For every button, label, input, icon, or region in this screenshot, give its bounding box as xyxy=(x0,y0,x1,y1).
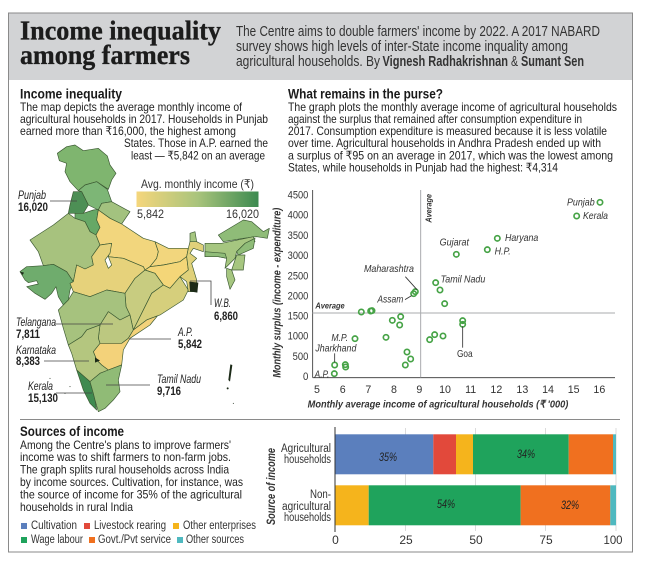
callout: Karnataka: 8,383 xyxy=(16,356,40,368)
x axis ticks xyxy=(314,384,605,396)
state points xyxy=(332,200,603,376)
scatter intro text: a surplus of ₹95 on an average in 2017, which was the lowest among xyxy=(288,148,613,162)
bar: agricultural households: 35% xyxy=(379,452,397,464)
y axis ticks: 2500 xyxy=(288,270,308,282)
y axis ticks: 4000 xyxy=(288,210,308,222)
callout: Tamil Nadu: 9,716 xyxy=(157,386,181,398)
x axis ticks: 15 xyxy=(568,384,580,396)
callout: W.B. xyxy=(190,281,238,323)
callout: Punjab xyxy=(18,190,77,214)
state labels: Jharkhand xyxy=(314,344,357,355)
state labels: Tamil Nadu xyxy=(441,274,486,285)
callout: W.B.: 6,860 xyxy=(214,311,238,323)
legend: income sources: Other sources xyxy=(186,534,244,546)
scatter intro text: over time. Agricultural households in Andhra Pradesh ended up with xyxy=(288,136,601,150)
heading: income inequality: Income inequality xyxy=(20,86,122,102)
callout: Kerala xyxy=(28,381,92,405)
callout: W.B.: W.B. xyxy=(214,298,231,310)
legend: monthly income colour ramp xyxy=(136,177,259,221)
state labels: M.P. xyxy=(331,333,348,344)
state labels: Kerala xyxy=(583,211,608,222)
axis labels: 100 xyxy=(604,533,623,547)
panel: sources of income xyxy=(20,423,623,547)
callout: Telangana: Telangana xyxy=(16,317,56,329)
x axis ticks: 7 xyxy=(365,384,371,396)
y axis ticks: 1000 xyxy=(288,331,308,343)
map intro text: States. Those in A.P. earned the xyxy=(124,136,268,150)
map intro text xyxy=(20,100,268,162)
callout: Telangana: 7,811 xyxy=(16,329,41,341)
state labels: A.P. xyxy=(314,369,329,380)
x axis ticks: 12 xyxy=(490,384,502,396)
y axis ticks: 3500 xyxy=(288,230,308,242)
x axis ticks: 13 xyxy=(516,384,528,396)
y axis title: Source of income xyxy=(264,448,278,525)
y axis ticks: 3000 xyxy=(288,250,308,262)
sources text: Among the Centre's plans to improve farmers' xyxy=(20,438,231,452)
bar: agricultural households xyxy=(335,434,616,474)
y axis ticks: 1500 xyxy=(288,311,308,323)
state labels: Assam xyxy=(377,295,404,306)
legend: income sources: Livestock rearing xyxy=(94,520,166,532)
y axis title: Monthly surplus (income - expenditure) xyxy=(271,207,283,378)
x axis ticks: 14 xyxy=(542,384,554,396)
axis labels: 50 xyxy=(469,533,483,547)
average labels: Average xyxy=(314,301,345,310)
x axis ticks: 6 xyxy=(340,384,346,396)
map intro text: The map depicts the average monthly income of xyxy=(20,100,243,114)
callout: A.P. xyxy=(129,327,202,351)
map callouts xyxy=(16,190,238,405)
callout: Tamil Nadu: Tamil Nadu xyxy=(157,374,201,386)
standfirst: Sumant Sen xyxy=(521,54,584,70)
legend: income sources: Other enterprises xyxy=(183,520,256,532)
callout: Karnataka: Karnataka xyxy=(16,345,56,357)
standfirst: & xyxy=(511,54,518,70)
stacked bar chart xyxy=(264,427,623,547)
y axis ticks: 0 xyxy=(303,371,308,383)
legend: monthly income colour ramp: 5,842 xyxy=(137,209,164,221)
title: among farmers xyxy=(20,40,190,70)
bar: non-agricultural households xyxy=(335,485,616,525)
category labels: Non- xyxy=(310,489,331,501)
x axis ticks: 10 xyxy=(439,384,451,396)
category labels: households xyxy=(284,454,331,466)
legend: monthly income colour ramp: 16,020 xyxy=(226,209,259,221)
leader lines xyxy=(335,277,463,362)
callout: A.P.: 5,842 xyxy=(178,339,202,351)
y axis ticks xyxy=(288,190,308,383)
scatter intro text: against the surplus that remained after consumption expenditure in xyxy=(288,112,582,126)
x axis ticks: 9 xyxy=(416,384,422,396)
sources text xyxy=(20,438,243,514)
map of India xyxy=(20,145,269,412)
sources text: by income sources. Cultivation, for instance, was xyxy=(20,475,243,489)
category labels xyxy=(281,443,331,524)
state labels: Goa xyxy=(457,349,473,360)
x axis title: Monthly average income of agricultural households (₹ '000) xyxy=(308,400,569,411)
panel: income inequality map xyxy=(16,86,269,412)
average labels: Average xyxy=(425,193,434,224)
standfirst: survey shows high levels of inter-State income inquality among xyxy=(236,39,568,55)
y axis ticks: 4500 xyxy=(288,190,308,202)
callout: Kerala: Kerala xyxy=(28,381,53,393)
state labels: H.P. xyxy=(495,246,511,257)
bar: non-agricultural households: 54% xyxy=(437,499,455,511)
callout: Telangana xyxy=(16,317,113,341)
map intro text: least — ₹5,842 on an average xyxy=(131,148,265,162)
y axis ticks: 500 xyxy=(293,351,308,363)
standfirst: agricultural households. By xyxy=(236,54,381,70)
title xyxy=(20,16,221,70)
legend: income sources: Cultivation xyxy=(31,520,77,532)
axis labels: 0 xyxy=(332,533,339,547)
category labels: households xyxy=(284,512,331,524)
heading: sources of income: Sources of income xyxy=(20,423,124,439)
header band xyxy=(9,14,632,80)
x axis ticks: 11 xyxy=(465,384,476,396)
standfirst xyxy=(236,24,600,70)
x axis ticks: 16 xyxy=(593,384,605,396)
panel: what remains in the purse xyxy=(271,86,617,411)
axis labels xyxy=(332,533,623,547)
y axis ticks: 2000 xyxy=(288,290,308,302)
standfirst: Vignesh Radhakrishnan xyxy=(382,54,508,70)
sources text: the source of income for 35% of the agricultural xyxy=(20,488,242,502)
state labels: Maharashtra xyxy=(364,264,414,275)
sources text: households in rural India xyxy=(20,500,133,514)
scatter intro text xyxy=(288,100,617,174)
callout: Tamil Nadu xyxy=(106,374,201,398)
x axis ticks: 5 xyxy=(314,384,320,396)
callout: Punjab: Punjab xyxy=(18,190,46,202)
map intro text: earned more than ₹16,000, the highest among xyxy=(20,124,236,138)
callout: Karnataka xyxy=(16,345,89,368)
state labels: Punjab xyxy=(567,197,595,208)
icon: dark coast patches and islands xyxy=(20,272,234,404)
title: Income inequality xyxy=(20,16,221,46)
average labels xyxy=(314,193,434,310)
category labels: agricultural xyxy=(282,501,331,513)
callout: Kerala: 15,130 xyxy=(28,393,58,405)
divider xyxy=(20,418,620,420)
axis labels: 75 xyxy=(539,533,553,547)
scatter chart xyxy=(271,190,615,411)
x axis ticks: 8 xyxy=(391,384,397,396)
callout: Punjab: 16,020 xyxy=(18,202,48,214)
axis labels: 25 xyxy=(399,533,413,547)
heading: what remains: What remains in the purse? xyxy=(288,86,443,102)
bar: agricultural households: 34% xyxy=(517,449,535,461)
legend: monthly income colour ramp: Avg. monthly income (₹) xyxy=(141,177,254,191)
category labels: Agricultural xyxy=(281,443,331,455)
sources text: income was to shift farmers to non-farm jobs. xyxy=(20,450,231,464)
callout: A.P.: A.P. xyxy=(177,327,193,339)
map intro text: agricultural households in 2017. Households in Punjab xyxy=(20,112,268,126)
legend: income sources xyxy=(21,520,256,546)
state labels: Gujarat xyxy=(440,238,470,249)
state labels: Haryana xyxy=(505,233,539,244)
sources text: The graph splits rural households across India xyxy=(20,462,229,476)
legend: income sources: Govt./Pvt service xyxy=(98,534,171,546)
legend: income sources: Wage labour xyxy=(31,534,83,546)
scatter intro text: States, while households in Punjab had the highest: ₹4,314 xyxy=(288,160,558,174)
bar: non-agricultural households: 32% xyxy=(561,500,579,512)
state labels xyxy=(314,197,608,380)
